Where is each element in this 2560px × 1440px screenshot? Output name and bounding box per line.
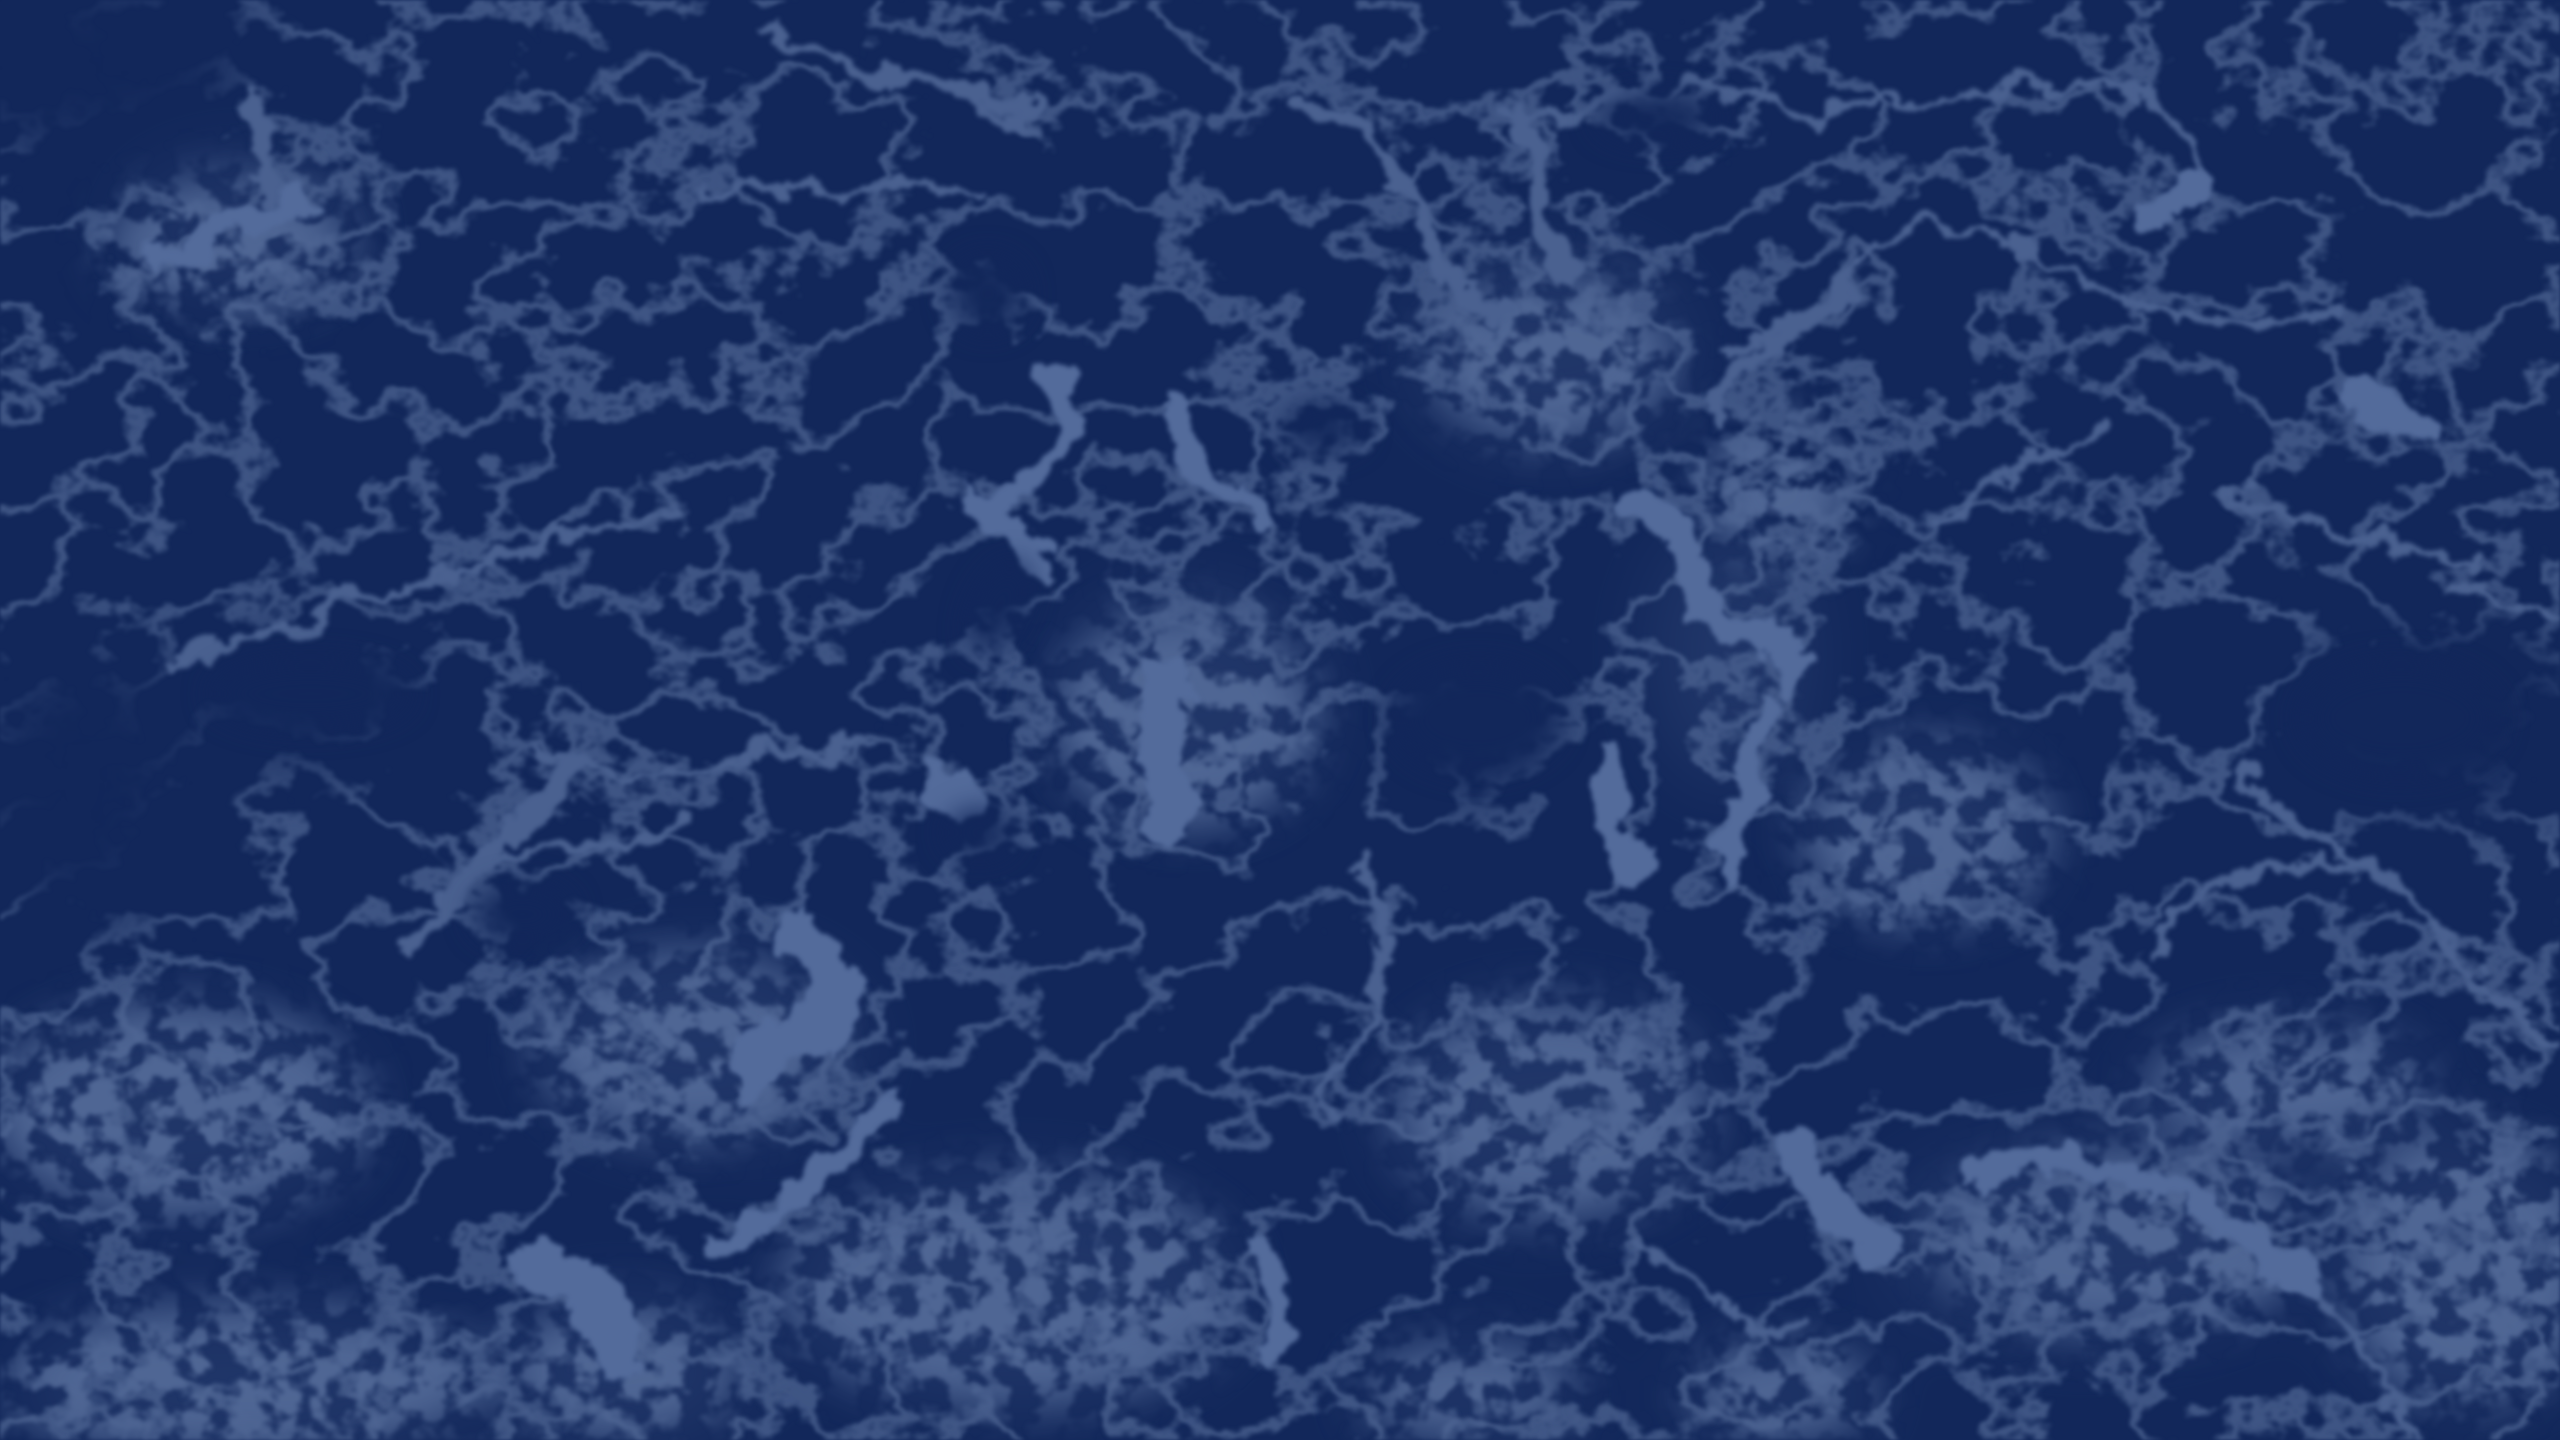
dark water pockets bbox=[212, 95, 2498, 944]
foam crests: bright bbox=[155, 188, 2433, 1355]
